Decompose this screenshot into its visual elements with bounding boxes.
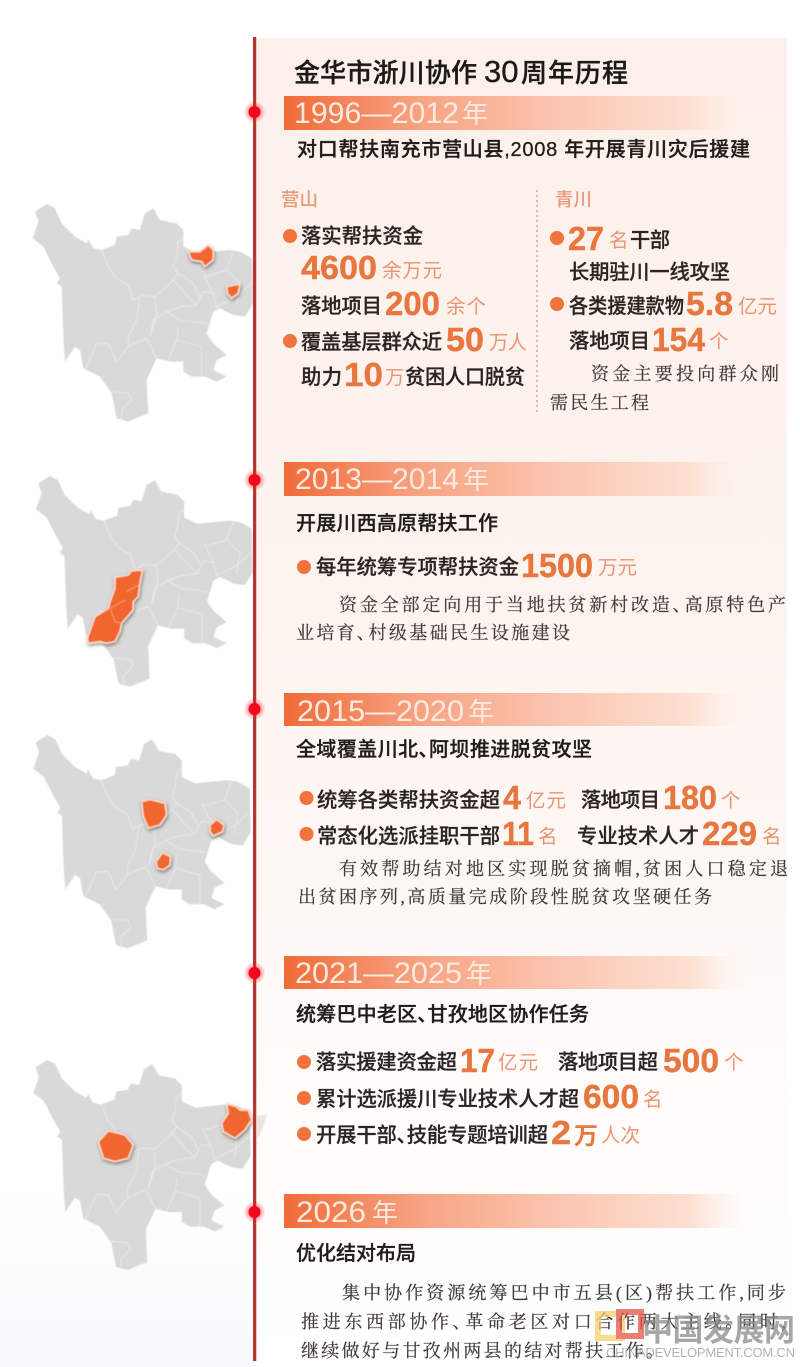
column: Yingshan [281,189,527,393]
stat row: training: 2 [551,1114,571,1151]
column: Yingshan: 贫困人口脱贫 [405,366,525,389]
timeline node 1996 [244,101,266,123]
column: Yingshan: 4600 [301,249,377,286]
column: Qingchuan: 个 [709,331,729,353]
column: Yingshan: 10 [344,356,383,393]
stat: annual funds: 1500 [521,547,593,584]
stat: annual funds [297,547,637,584]
year band 2013-2014: 2013—2014 [295,463,459,496]
year band 2015-2020 [284,693,748,728]
stat row: funds and projects: 个 [724,1052,744,1074]
column: Qingchuan: 长期驻川一线攻坚 [569,261,730,284]
year band 2026: 2026 [296,1196,366,1229]
stat row: cadres and talent [300,815,782,852]
description: 推进东西部协作、革命老区对口合作两大主线。同时, [301,1312,786,1332]
stat row: funds and projects: 个 [721,790,741,812]
column: Qingchuan: 青川 [555,189,592,210]
description [301,1283,786,1361]
stat row: funds and projects: 落地项目 [581,789,660,812]
logo icon [598,1312,641,1338]
map 1: Yingshan and Qingchuan [33,204,253,422]
stat row: talent [297,1078,663,1115]
description: 资金全部定向用于当地扶贫新村改造、高原特色产 [339,595,786,615]
column: Qingchuan: 资金主要投向群众刚 [591,363,779,384]
timeline node 2021 [244,962,266,984]
title [294,54,628,89]
section 1996-2012 [281,96,779,413]
timeline line [244,37,266,1361]
stat row: funds and projects: 17 [460,1042,495,1079]
stat row: talent: 600 [583,1078,639,1115]
stat row: cadres and talent: 常态化选派挂职干部 [317,825,500,848]
year band 1996-2012: 年 [462,99,488,129]
column: Yingshan: 营山 [281,189,318,210]
stat row: cadres and talent: 名 [538,826,558,848]
stat row: cadres and talent: 名 [762,826,782,848]
description [296,595,786,643]
section 2013-2014 [284,462,786,643]
column: Yingshan: 200 [385,285,440,322]
subtitle: 统筹巴中老区、甘孜地区协作任务 [296,1003,589,1026]
year band 2026 [284,1194,748,1229]
stat row: funds and projects [297,1042,744,1079]
stat row: training: 万 [574,1123,598,1150]
section 2021-2025 [284,956,748,1151]
column: Qingchuan: 干部 [630,229,670,252]
stat row: cadres and talent: 11 [502,815,534,852]
stat row: training: 开展干部、技能专题培训超 [316,1124,548,1147]
column: Yingshan: 余万元 [382,260,442,282]
stat row: funds and projects: 统筹各类帮扶资金超 [317,789,500,812]
stat row: funds and projects [300,779,741,816]
year band 2021-2025 [284,956,748,990]
column: Qingchuan: 各类援建款物 [569,295,684,318]
map 2: western Sichuan plateau [36,476,253,687]
column: Yingshan: 覆盖基层群众近 [301,331,442,354]
stat: annual funds: 万元 [598,557,637,579]
stat row: funds and projects: 180 [663,779,717,816]
column: Yingshan: 落实帮扶资金 [301,225,423,248]
map 3: northern Sichuan and Aba [33,735,251,948]
stat row: talent: 名 [643,1089,663,1111]
column: Yingshan: 万 [385,367,405,389]
stat row: funds and projects: 4 [503,779,522,816]
bottom left tint [0,1180,255,1367]
subtitle: 开展川西高原帮扶工作 [296,512,498,535]
year band 1996-2012: 1996—2012 [294,97,459,130]
column: Yingshan: 助力 [301,366,342,389]
year band 2026: 年 [372,1198,398,1228]
column: Yingshan: 落地项目 [301,295,382,318]
watermark: China Development logo [598,1312,795,1360]
logo url: CHINADEVELOPMENT.COM.CN [606,1345,795,1360]
timeline node 2015 [244,698,266,720]
year band 2013-2014 [284,462,748,496]
stat: annual funds: 每年统筹专项帮扶资金 [316,556,519,579]
year band 2013-2014: 年 [463,465,489,495]
stat row: funds and projects: 落实援建资金超 [316,1051,457,1074]
column: Qingchuan [550,189,779,413]
subtitle: 对口帮扶南充市营山县,2008 年开展青川灾后援建 [297,138,750,161]
title: 30 [484,54,518,89]
stat row: cadres and talent: 专业技术人才 [577,825,699,848]
column: Qingchuan: 154 [652,321,706,358]
section 2015-2020 [284,693,788,907]
background panel [255,38,787,1367]
stat row: training [297,1114,640,1151]
description: 业培育、村级基础民生设施建设 [296,623,570,643]
title: 金华市浙川协作 [294,58,477,88]
column: Yingshan: 余个 [446,296,486,318]
column: Qingchuan: 落地项目 [569,330,650,353]
title: 周年历程 [521,58,628,88]
stat row: funds and projects: 落地项目超 [558,1051,658,1074]
column: Yingshan: 50 [446,321,484,358]
year band 1996-2012 [284,96,748,130]
stat row: talent: 累计选派援川专业技术人才超 [316,1088,579,1111]
description: 继续做好与甘孜州两县的结对帮扶工作。 [301,1341,655,1361]
column: Yingshan: 万人 [489,332,527,354]
logo name: 中国发展网 [642,1313,795,1348]
stat row: funds and projects: 500 [663,1042,719,1079]
column divider [536,190,538,412]
description: 有效帮助结对地区实现脱贫摘帽,贫困人口稳定退 [339,859,788,879]
year band 2021-2025: 2021—2025 [295,957,462,990]
column: Qingchuan: 亿元 [738,296,777,318]
subtitle: 全域覆盖川北、阿坝推进脱贫攻坚 [296,738,592,761]
description: 集中协作资源统筹巴中市五县(区)帮扶工作,同步 [342,1283,786,1304]
stat row: cadres and talent: 229 [702,815,757,852]
year band 2015-2020: 2015—2020 [297,695,464,728]
description: 出贫困序列,高质量完成阶段性脱贫攻坚硬任务 [298,886,712,907]
map 4: Bazhong and Ganzi [33,1060,267,1270]
column: Qingchuan: 27 [568,220,604,257]
column: Qingchuan: 5.8 [686,285,733,322]
subtitle: 优化结对布局 [296,1242,416,1265]
stat row: funds and projects: 亿元 [498,1052,538,1074]
section 2026 [284,1194,786,1361]
stat row: funds and projects: 亿元 [526,790,566,812]
column: Qingchuan: 名 [609,230,629,252]
year band 2015-2020: 年 [468,697,494,727]
column: Qingchuan: 需民生工程 [550,393,649,413]
stat row: training: 人次 [601,1125,640,1147]
description [298,859,788,907]
year band 2021-2025: 年 [466,959,492,989]
timeline node 2013 [244,469,266,491]
timeline node 2026 [244,1201,266,1223]
